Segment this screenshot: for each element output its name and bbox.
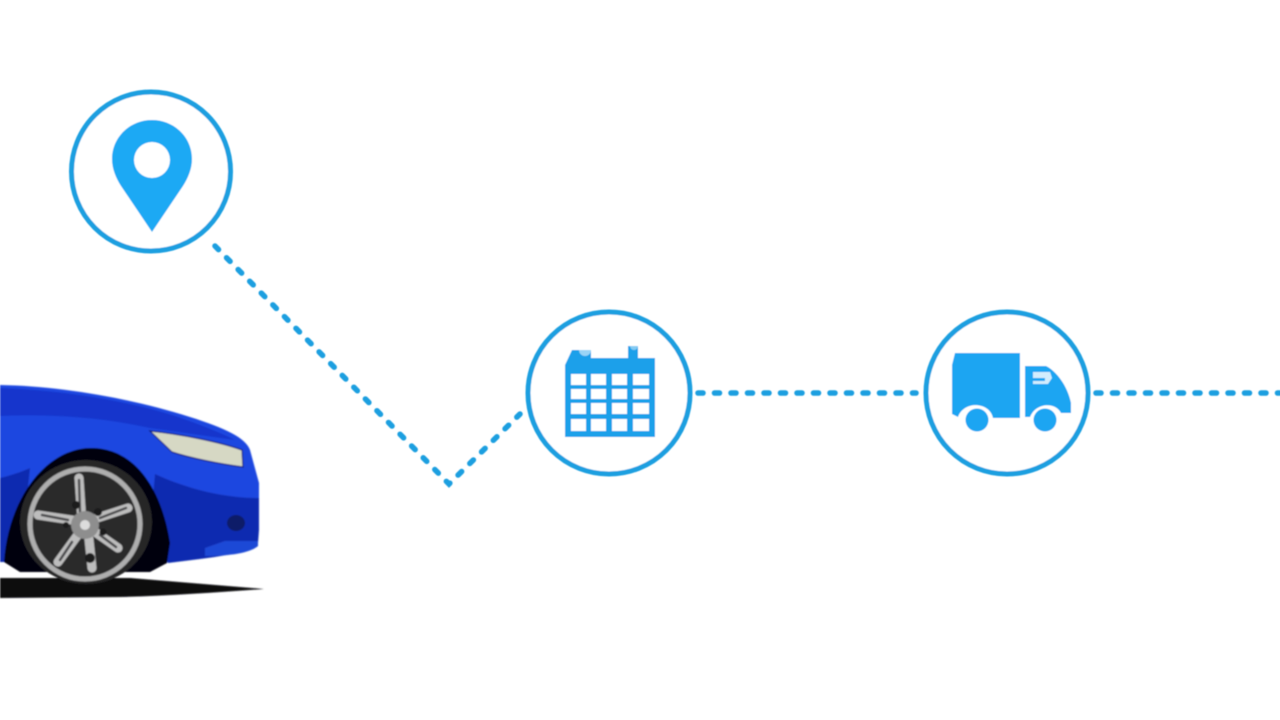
car upper body	[0, 385, 259, 520]
dashed route from calendar to truck	[698, 390, 916, 396]
icon: location pin in circle	[72, 92, 230, 251]
icon: calendar in circle	[528, 312, 690, 474]
infographic canvas	[0, 88, 1280, 600]
icon: delivery truck in circle	[926, 312, 1088, 474]
dashed route leaving truck	[1096, 390, 1280, 396]
wheel arch	[4, 448, 170, 572]
fog lamp	[227, 515, 245, 531]
tyre	[20, 460, 152, 584]
car shadow	[0, 578, 264, 598]
rim	[30, 469, 140, 579]
headlight	[150, 431, 243, 467]
spokes	[38, 478, 128, 568]
left door lower panel	[0, 468, 30, 562]
wheel hub	[71, 511, 99, 539]
hood upper band	[0, 388, 235, 440]
car front	[0, 385, 264, 598]
bumper lip	[205, 541, 258, 556]
car lower bumper	[150, 474, 259, 563]
dashed route from pin down to calendar	[215, 246, 520, 484]
